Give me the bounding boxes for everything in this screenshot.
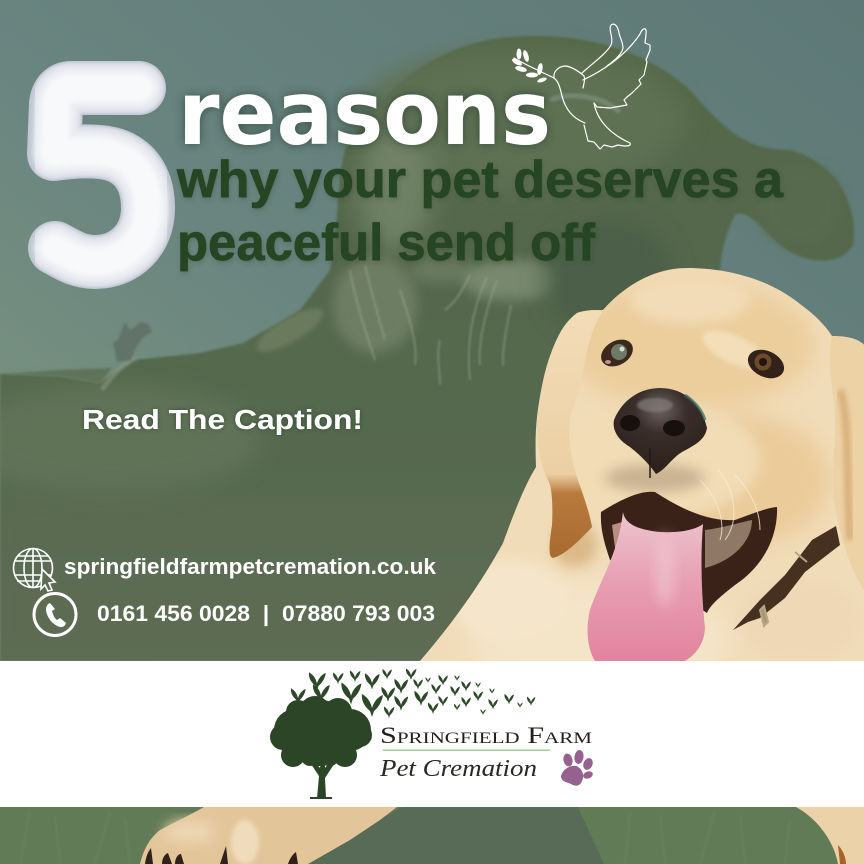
dove icon: [511, 24, 650, 149]
logo: company name: Springfield Farm: [380, 723, 592, 748]
left paw: [140, 807, 397, 864]
logo: pet cremation: Pet Cremation: [379, 756, 537, 782]
logo: tree: [270, 696, 372, 799]
website: springfieldfarmpetcremation.co.uk: [64, 554, 436, 579]
muzzle: [652, 408, 762, 516]
heading: why your pet deserves a peaceful send off: peaceful send off: [177, 214, 596, 272]
background dog head tones: [0, 50, 842, 661]
background dog silhouette: [0, 36, 854, 661]
mouth: [601, 492, 777, 613]
icon: globe with cursor: [14, 548, 55, 591]
heading: reasons: reasons: [178, 62, 551, 165]
right paw: [796, 807, 864, 864]
foreground labrador: [420, 268, 864, 661]
footer photo strip: [0, 807, 864, 864]
call to action: Read The Caption!: [82, 404, 363, 435]
tongue: [588, 512, 705, 661]
heading: why your pet deserves a peaceful send off: [176, 151, 784, 272]
number 5: [54, 88, 148, 262]
right ear: [830, 336, 864, 590]
logo band: [0, 661, 864, 807]
icon: purple paw: [561, 749, 594, 786]
collar: [733, 526, 840, 630]
icon: phone: [34, 594, 76, 636]
eye: left: [601, 340, 633, 366]
eye: right: [748, 350, 784, 378]
phone numbers: 0161 456 0028 | 07880 793 003: [97, 601, 435, 626]
logo: divider: [383, 750, 550, 751]
heading: why your pet deserves a peaceful send off: why your pet deserves a: [176, 151, 784, 209]
dog head and body: [420, 268, 864, 661]
nose: [614, 388, 707, 478]
left ear: [537, 310, 602, 558]
footer green panel: [300, 807, 604, 864]
logo: birds: [291, 668, 535, 718]
whiskers: [700, 470, 760, 540]
photo background: [0, 0, 864, 661]
